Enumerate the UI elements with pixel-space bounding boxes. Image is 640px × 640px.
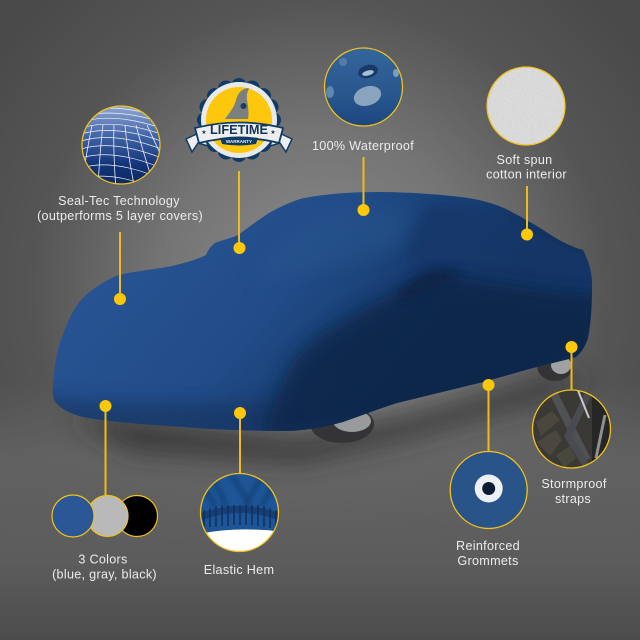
leader line and dot: Colors: [100, 400, 112, 495]
label: Stormproof: [541, 477, 607, 491]
warranty wording: WARRANTY: [226, 139, 252, 144]
leader line and dot: Straps: [566, 341, 578, 391]
icon: elastic hem fabric: [198, 474, 282, 556]
warranty tag: [220, 136, 258, 146]
label: Reinforced: [456, 539, 520, 553]
banner stars: ★: [270, 129, 276, 136]
icon: straps around tire: [532, 388, 612, 472]
leader line and dot: Elastic hem: [234, 407, 246, 474]
label: Seal-Tec Technology: [58, 194, 180, 208]
swatch: gray: [87, 496, 128, 536]
leader line and dot: Seal-Tec: [114, 232, 126, 305]
panel: Reinforced Grommets: [450, 452, 527, 568]
scalloped edge: [197, 78, 281, 162]
car wheels: [310, 351, 573, 443]
banner stars: ★: [201, 129, 207, 136]
label: cotton interior: [486, 168, 567, 182]
swatch: black: [116, 496, 158, 536]
ribbon tail: right: [270, 131, 292, 152]
icon: grommet: [450, 452, 527, 528]
panel: Elastic Hem: [198, 474, 282, 577]
swatch: blue: [52, 495, 94, 537]
leader line and dot: Cotton interior: [521, 186, 533, 240]
panel: Lifetime warranty badge: [186, 78, 292, 162]
panel: 3 Colors: [52, 495, 158, 582]
panel: 100% Waterproof: [312, 48, 414, 153]
leader line and dot: Lifetime warranty: [234, 171, 246, 254]
seal medallion: [201, 82, 277, 158]
panel: Soft spun cotton interior: [486, 67, 567, 182]
leader line and dot: Grommets: [482, 379, 494, 452]
panel: Seal-Tec Technology: [37, 106, 203, 223]
car cover: [52, 192, 592, 431]
label: Elastic Hem: [204, 563, 274, 577]
banner wording: LIFETIME: [210, 122, 268, 137]
label: (outperforms 5 layer covers): [37, 209, 203, 223]
label: (blue, gray, black): [52, 568, 157, 582]
icon: woven mesh: [81, 105, 161, 185]
leader line and dot: Waterproof: [358, 157, 370, 216]
label: 3 Colors: [78, 552, 128, 566]
icon: water droplets on fabric: [324, 48, 402, 126]
label: Soft spun: [497, 153, 552, 167]
label: 100% Waterproof: [312, 139, 414, 153]
ribbon tail: left: [186, 131, 208, 152]
label: Grommets: [457, 554, 519, 568]
ribbon banner: [195, 122, 283, 143]
panel: Stormproof straps: [532, 388, 612, 506]
label: straps: [555, 492, 591, 506]
icon: cotton texture: [487, 67, 565, 145]
